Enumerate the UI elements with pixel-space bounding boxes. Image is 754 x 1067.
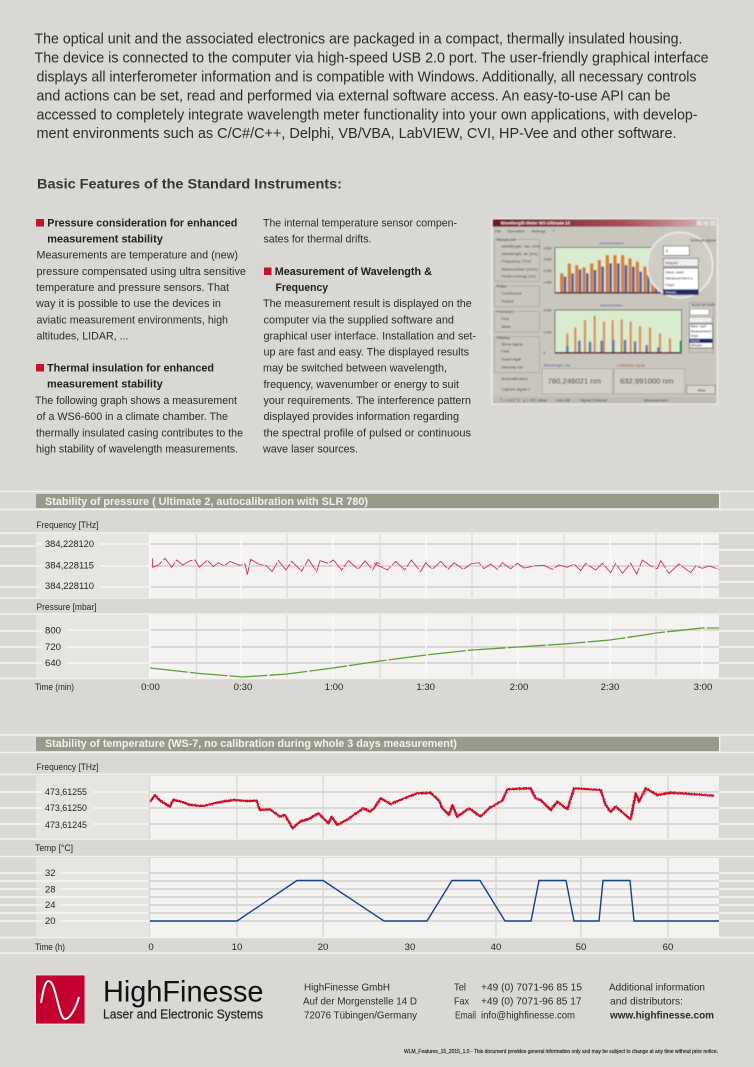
software screenshot: Frequency (THz) [501,259,532,264]
time axis: 50 [576,942,586,953]
frequency tick labels: 384,228110 [45,581,94,592]
screenshot side controls: Settings signal [690,237,716,242]
logo: HighFinesse [103,976,264,1009]
software screenshot: Wavenumber (1/cm) [501,266,538,271]
screenshot chart top: 3,000 [543,258,552,262]
screenshot side controls: Days [691,334,699,338]
software screenshot: Operation [507,228,525,233]
axis title: frequency: Frequency [THz] [36,520,98,530]
disclaimer: WLM_Features_15_2015_1.0 - This document provides general information only and may be subject to change at any time without prior notice. [404,1049,718,1055]
software screenshot: Wavelength Meter WS Ultimate 10 [501,221,571,226]
screenshot magnifier: Manl. start [665,269,685,274]
contact details: Fax [454,997,470,1008]
software screenshot: Show signal [501,341,523,346]
feature: wavelength and frequency: computer via the supplied software and [264,314,454,326]
intro text block: and actions can be set, read and performed via external software access. An easy-to-use API can be [36,88,670,104]
screenshot chart top [543,242,665,293]
screenshot magnifier: Measurement s [665,275,693,280]
temperature sensor note [263,218,457,246]
software screenshot: Wide [501,324,511,329]
software screenshot: Autocalibration [501,376,528,381]
temperature tick labels: 32 [45,868,56,879]
feature: pressure consideration: altitudes, LIDAR, ... [36,330,128,342]
time axis [35,942,673,953]
screenshot magnifier: Hours [665,260,678,265]
frequency tick labels [45,539,94,592]
screenshot side controls: Measurement [691,329,711,333]
additional information: Additional information [609,983,705,994]
contact details: +49 (0) 7071-96 85 15 [481,983,582,994]
additional information: and distributors: [610,997,683,1008]
time axis: 1:00 [325,682,343,693]
feature: pressure consideration: Pressure consideration for enhanced [47,218,237,230]
logo: Laser and Electronic Systems [103,1008,263,1022]
screenshot status bar: T = 24,3 °C [500,397,520,402]
axis title: temperature: Temp [°C] [35,843,73,853]
software screenshot: Photon energy (eV) [501,274,537,279]
software screenshot: wavelength, air (nm) [501,251,538,256]
screenshot wavelength readouts: 632,991000 nm [620,377,673,386]
software screenshot: wavelength, vac. (nm) [501,243,541,248]
pressure tick labels [45,626,61,669]
company address: HighFinesse GmbH [304,983,390,994]
feature: wavelength and frequency: up are fast and easy. The displayed results [264,346,469,358]
time axis: 10 [232,942,242,953]
time axis: Time (h) [35,942,65,952]
pressure tick labels: 720 [45,642,61,653]
screenshot chart top: 4,000 [543,246,552,250]
screenshot magnifier: 3 [665,248,668,254]
feature: pressure consideration: Measurements are temperature and (new) [36,250,238,262]
title bar: Stability of pressure ( Ultimate 2, autocalibration with SLR 780) [45,496,368,508]
screenshot side controls: Minutes [691,344,703,348]
screenshot chart bottom: 4,000 [543,309,552,313]
additional information [609,983,714,1022]
feature: pressure consideration: way it is possible to use the devices in [35,298,221,310]
title bar [36,494,719,508]
software screenshot: Display [497,335,510,340]
feature: wavelength and frequency: your requirements. The interference pattern [264,395,471,407]
feature: wavelength and frequency: wave laser sources. [262,444,358,456]
temperature sensor note: sates for thermal drifts. [264,234,372,246]
screenshot wavelength readouts: 780,246021 nm [548,377,601,386]
screenshot chart bottom: 0 [543,351,545,355]
intro text block: The device is connected to the computer via high-speed USB 2.0 port. The user-friendly graphical interface [34,50,708,66]
screenshot side controls: AutoCal each [691,302,715,307]
time axis: 2:30 [601,682,619,693]
axis title: pressure: Pressure [mbar] [36,602,96,612]
screenshot side controls: Manl. start [691,325,706,329]
icon: red square with sine wave [36,975,85,1024]
intro text block: The optical unit and the associated electronics are packaged in a compact, thermally insulated housing. [34,32,682,48]
section heading: Basic Features of the Standard Instruments: [37,176,342,192]
temperature trace [150,880,719,921]
screenshot chart top: Interferometers [599,242,624,246]
software screenshot: Fine [501,316,510,321]
time axis: 40 [491,942,501,953]
screenshot chart bottom: 2,000 [543,330,552,334]
feature: thermal insulation: thermally insulated casing contributes to the [36,428,243,440]
intro text block: ment environments such as C/C#/C++, Delphi, VB/VBA, LabVIEW, CVI, HP-Vee and other software. [36,126,676,142]
temperature tick labels: 24 [45,900,56,911]
logo [36,975,264,1024]
feature: wavelength and frequency [262,266,476,456]
temperature tick labels: 20 [45,916,56,927]
screenshot wavelength readouts: Wavelength, vac. [543,364,571,368]
screenshot chart top: 2,000 [543,269,552,273]
frequency tick labels: 473,61255 [45,787,87,798]
time axis: 30 [405,942,415,953]
feature: thermal insulation: of a WS6-600 in a climate chamber. The [36,411,228,423]
company address: Auf der Morgenstelle 14 D [303,997,417,1008]
title bar [36,737,719,751]
screenshot wavelength readouts [542,364,715,394]
frequency tick labels: 473,61245 [45,820,87,831]
company address [303,983,418,1022]
feature: wavelength and frequency: Frequency [276,282,329,294]
contact details: +49 (0) 7071-96 85 17 [481,997,582,1008]
feature: wavelength and frequency: frequency, wavenumber or energy to suit [264,379,460,391]
feature: pressure consideration: aviatic measurement environments, high [36,314,228,326]
feature: pressure consideration: measurement stability [47,234,163,246]
software screenshot: Intensity bar [501,365,524,370]
contact details: info@highfinesse.com [481,1011,575,1022]
frequency tick labels: 473,61250 [45,803,87,814]
screenshot chart bottom [543,303,682,355]
screenshot status bar: p = 971 mbar [523,397,548,402]
software screenshot: Continuous [501,291,522,296]
frequency trace [152,558,719,575]
intro text block: accessed to completely integrate wavelength meter functionality into your own applications, with develop- [36,108,698,124]
time axis [35,682,712,693]
bullet [36,364,44,372]
frequency tick labels: 384,228120 [45,539,94,550]
chart: stability of temperature [0,735,754,953]
axis title: frequency: Frequency [THz] [36,762,98,772]
company address: 72076 Tübingen/Germany [304,1011,418,1022]
screenshot status bar: Signal Channel [580,397,607,402]
time axis: Time (min) [35,682,74,692]
feature: wavelength and frequency: the spectral profile of pulsed or continuous [264,428,471,440]
feature: thermal insulation: The following graph shows a measurement [35,395,238,407]
feature: wavelength and frequency: The measurement result is displayed on the [263,298,472,310]
time axis: 0:00 [141,682,160,693]
feature: wavelength and frequency: graphical user interface. Installation and set- [264,330,476,342]
bullet [264,268,272,275]
frequency trace [150,788,714,828]
pressure tick labels: 640 [45,658,61,669]
pressure tick labels: 800 [45,626,61,636]
time axis: 0 [148,942,154,953]
time axis: 20 [318,942,328,953]
time axis: 3:00 [694,682,712,693]
software screenshot: Capture signal 1 [501,387,531,392]
contact details: Tel [454,983,466,994]
frequency tick labels: 384,228115 [45,560,94,572]
temperature sensor note: The internal temperature sensor compen- [263,218,457,230]
chart: stability of pressure [0,492,754,693]
screenshot chart bottom: Interferometer [600,303,624,307]
feature: wavelength and frequency: may be switched between wavelength, [263,363,447,375]
time axis: 1:30 [416,682,435,693]
intro text block: displays all interferometer information and is compatible with Windows. Additionally, all necessary controls [36,70,696,86]
feature: thermal insulation: measurement stability [47,378,163,390]
screenshot magnifier: Hours [665,289,676,294]
software screenshot: Fast [501,349,510,354]
software screenshot: Pulse [497,284,507,289]
software screenshot: Settings [531,228,546,233]
feature: wavelength and frequency: displayed provides information regarding [264,411,459,423]
time axis: 2:00 [510,682,528,693]
feature: thermal insulation [35,363,243,456]
software screenshot: Pulsed [501,299,514,304]
frequency tick labels [45,787,87,831]
additional information: www.highfinesse.com [609,1011,714,1022]
feature: pressure consideration [35,218,246,342]
screenshot wavelength readouts: Calibration signal [617,364,645,368]
bullet [36,219,44,226]
screenshot status bar [493,397,717,403]
intro text block [34,32,708,142]
screenshot magnifier [647,232,713,298]
software screenshot: File [495,228,502,233]
screenshot status bar: Measurement [644,397,669,402]
time axis: 0:30 [234,682,252,693]
feature: thermal insulation: high stability of wavelength measurements. [36,444,238,456]
screenshot magnifier: Days [665,282,674,287]
screenshot side controls [689,237,716,353]
screenshot chart top: 1,000 [543,280,552,284]
contact details: Email [455,1011,476,1022]
feature: wavelength and frequency: Measurement of Wavelength & [275,266,432,278]
software screenshot: Result unit [497,237,516,242]
temperature tick labels [45,868,56,927]
software screenshot: Precision [497,309,513,314]
feature: pressure consideration: pressure compensated using ultra sensitive [36,266,246,278]
screenshot wavelength readouts: Stop [697,387,706,392]
time axis: 60 [663,942,673,953]
contact details [454,983,582,1022]
title bar: Stability of temperature (WS-7, no calibration during whole 3 days measurement) [45,738,457,750]
feature: thermal insulation: Thermal insulation for enhanced [47,363,214,375]
screenshot side controls: Hours [691,339,700,343]
feature: pressure consideration: temperature and pressure sensors. That [36,282,230,294]
software screenshot: Exact legal [501,357,521,362]
software screenshot: ? [553,228,556,233]
temperature tick labels: 28 [45,885,56,896]
software screenshot [491,218,718,405]
pressure trace [150,628,719,677]
screenshot status bar: Link Off [556,397,571,402]
